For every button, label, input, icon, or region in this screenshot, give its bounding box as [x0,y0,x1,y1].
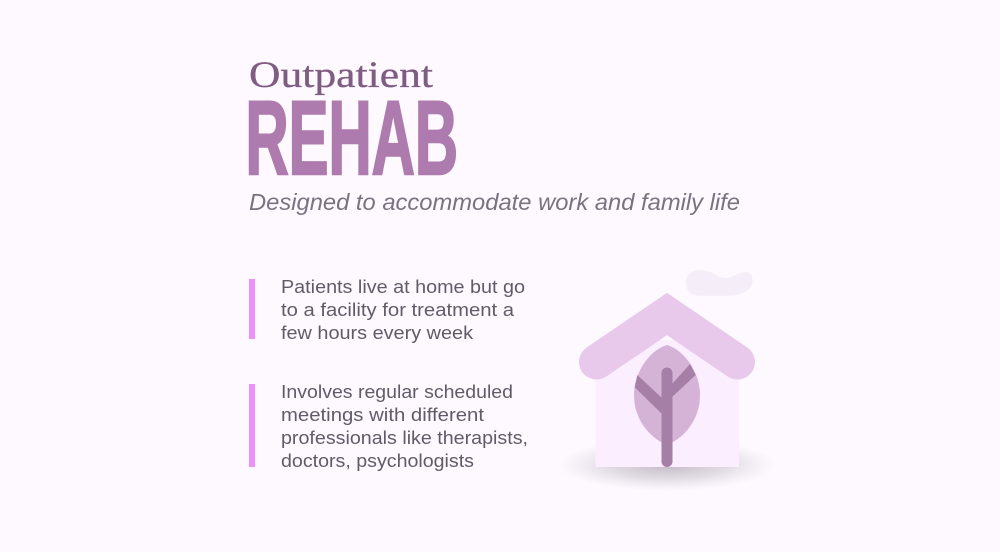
title: REHAB: REHAB [246,80,458,197]
icon: house with tree [557,270,777,491]
bullet 1 accent bar [249,279,255,339]
house roof [596,314,738,362]
bullet 2 [249,381,528,471]
bullet 1 text: Patients live at home but go [281,276,525,297]
bullet 2 accent bar [249,384,255,467]
bullet 1 [249,276,525,343]
bullet 2 text: meetings with different [281,404,484,425]
bullet 1 text: to a facility for treatment a [281,299,515,320]
tree trunk and branches [635,364,696,467]
bullet 2 text: doctors, psychologists [281,450,474,471]
bullet 2 text [281,381,528,471]
bullet 2 text: professionals like therapists, [281,427,528,448]
house wall [596,340,739,467]
ground shadow [557,439,777,491]
bullet 1 text: few hours every week [281,322,474,343]
bullet 2 text: Involves regular scheduled [281,381,513,402]
bullet 1 text [281,276,525,343]
tree leaf [634,345,700,445]
subtitle: Designed to accommodate work and family life [249,189,740,215]
title: Outpatient: Outpatient [249,55,434,96]
chimney smoke [686,270,753,296]
